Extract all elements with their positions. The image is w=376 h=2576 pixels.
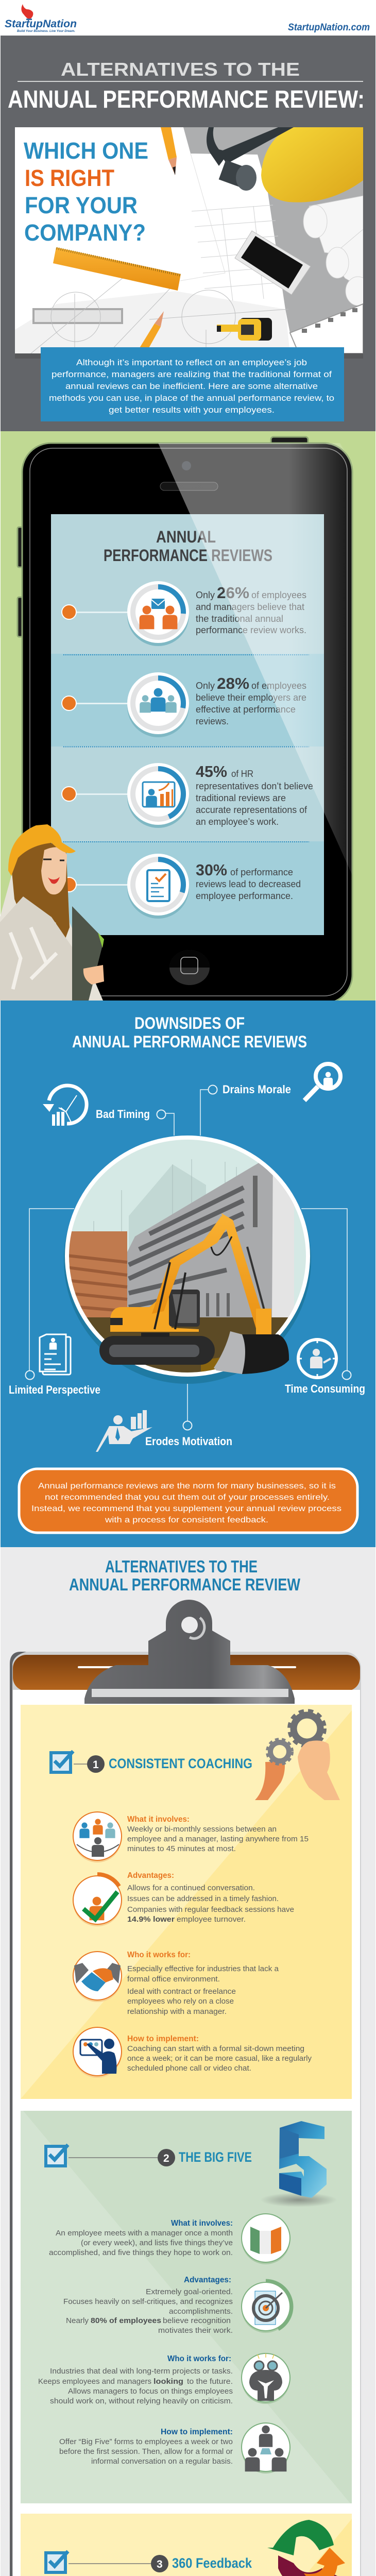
label: erodes motivation: Erodes Motivation: [145, 1435, 232, 1448]
item: how to implement: Coaching can start with a formal sit-down meeting: [127, 2044, 304, 2053]
icon: magnifier: [304, 1064, 340, 1100]
item: who it works for: Who it works for:: [127, 1951, 191, 1959]
label: bad timing: Bad Timing: [96, 1108, 150, 1121]
item: how to implement: informal conversation on a regular basis.: [91, 2457, 233, 2466]
item: who it works for: employees who rely on a close: [127, 1997, 234, 2006]
heading: the big five: 2: [163, 2153, 169, 2164]
intro text block: performance, managers are realizing that the traditional format of: [52, 369, 332, 379]
stat: 45%: [62, 762, 313, 828]
icon: lower pencil: [140, 311, 164, 347]
callout: recommendation: Instead, we recommend that you supplement your annual review process: [31, 1504, 341, 1513]
intro text block: [41, 347, 344, 421]
item: advantages: Issues can be addressed in a timely fashion.: [127, 1894, 279, 1903]
item: how to implement: How to implement:: [127, 2035, 199, 2043]
stat: 45%: representatives don’t believe: [196, 781, 313, 791]
item: what it involves: accomplished, and five things they hope to work on.: [49, 2248, 233, 2257]
stat: 26%: the traditional annual: [196, 614, 283, 624]
heading: downsides: DOWNSIDES OF: [134, 1014, 245, 1032]
card 3: 360 feedback: [21, 2514, 352, 2576]
item: advantages: 14.9% lower: [127, 1915, 175, 1924]
item: advantages: Focuses heavily on self-critiques, and recognizes: [63, 2297, 233, 2306]
icon: 3D five: [260, 2121, 337, 2207]
stat: 30%: 30%: [196, 861, 227, 879]
icon: smartphone: [235, 231, 311, 295]
item: advantages: Advantages:: [184, 2276, 231, 2284]
ground: [87, 1317, 288, 1372]
icon: time target: [297, 1338, 338, 1379]
heading: consistent coaching: [51, 1751, 252, 1773]
stat: 28%: 28%: [217, 674, 249, 692]
item: advantages: 80% of employees: [91, 2316, 161, 2325]
building: [127, 1154, 294, 1317]
icon: spiral notepad: [290, 304, 363, 353]
stat: 30%: [62, 854, 301, 919]
excavator: [99, 1213, 289, 1374]
camera: [182, 461, 191, 470]
intro text block: annual reviews can be inefficient. Here are some alternative: [65, 381, 318, 391]
stat: 26%: performance review works.: [196, 625, 306, 635]
item: advantages: Allows for a continued conversation.: [127, 1884, 255, 1892]
home button: [169, 950, 210, 985]
item: how to implement: before the first session. Then, allow for a formal or: [59, 2447, 233, 2456]
connector lines: [26, 1085, 351, 1430]
item: how to implement: How to implement:: [161, 2428, 233, 2436]
heading: 360 feedback: 3: [157, 2558, 163, 2570]
lower drafting sheet: [15, 291, 290, 353]
hero illustration: [15, 127, 370, 353]
item: who it works for: Allows managers to focus on things employees: [68, 2387, 233, 2396]
label: time consuming: Time Consuming: [285, 1382, 365, 1395]
item: who it works for: to the future.: [187, 2377, 233, 2386]
callout: recommendation: Annual performance reviews are the norm for many businesses, so it is: [38, 1482, 336, 1490]
bucket: [235, 1334, 289, 1374]
illustration: excavator dome: [62, 1136, 314, 1384]
item: who it works for: Keeps employees and managers: [38, 2377, 151, 2386]
heading: annual performance reviews: [104, 528, 272, 565]
intro text block: methods you can use, in place of the annual performance review, to: [49, 393, 334, 403]
clipboard clip: [78, 1600, 296, 1704]
item: who it works for: looking: [153, 2377, 183, 2386]
heading: alternatives: [69, 1557, 301, 1594]
logo: StartupNation: [5, 4, 77, 33]
item: how to implement: [73, 2027, 312, 2078]
stat: 30%: of performance: [230, 867, 293, 877]
icon: hammer: [207, 127, 294, 191]
panel: phone screen: [51, 514, 324, 935]
item: how to implement: once a week; or it can be more casual, like a regularly: [127, 2054, 312, 2063]
item: what it involves: employee and a manager, lasting anywhere from 15: [127, 1835, 309, 1843]
item: advantages: Nearly: [66, 2316, 89, 2325]
header: logos: [5, 4, 370, 33]
item: advantages: believe recognition: [163, 2316, 231, 2325]
heading: consistent coaching: CONSISTENT COACHING: [109, 1756, 252, 1771]
icon: cycle arrows: [267, 2520, 345, 2576]
heading: downsides: ANNUAL PERFORMANCE REVIEWS: [72, 1032, 307, 1051]
heading: 360 feedback: 360 Feedback: [172, 2555, 252, 2571]
item: advantages: motivates their work.: [158, 2326, 233, 2335]
item: who it works for: Ideal with contract or freelance: [127, 1987, 236, 1996]
heading: which one is right: FOR YOUR: [25, 192, 138, 218]
item: who it works for: [38, 2353, 290, 2405]
callout: recommendation: [19, 1469, 357, 1533]
heading: which one is right: IS RIGHT: [25, 165, 114, 191]
item: what it involves: [49, 2214, 290, 2264]
item: who it works for: Especially effective for industries that lack a: [127, 1964, 279, 1973]
label: drains morale: Drains Morale: [223, 1083, 291, 1096]
stat: 45%: 45%: [196, 762, 227, 781]
stat: 45%: traditional reviews are: [196, 793, 286, 803]
stat: 28%: believe their employers are: [196, 692, 306, 703]
intro text block: get better results with your employees.: [109, 405, 275, 415]
title line 1: ALTERNATIVES TO THE: [61, 59, 300, 80]
icon: pencil: [161, 127, 177, 175]
item: advantages: [63, 2276, 292, 2335]
item: how to implement: Offer “Big Five” forms to employees a week or two: [59, 2437, 233, 2446]
brick wall: [67, 1231, 127, 1317]
card 1: consistent coaching: [21, 1705, 352, 2099]
callout: recommendation: with a process for consistent feedback.: [105, 1516, 268, 1524]
heading: the big five: THE BIG FIVE: [179, 2149, 252, 2165]
item: how to implement: [59, 2423, 290, 2473]
item: what it involves: What it involves:: [171, 2219, 233, 2228]
item: what it involves: minutes to 45 minutes at most.: [127, 1844, 236, 1853]
icon: hard hat: [261, 127, 363, 202]
illustration: woman in hard hat: [0, 824, 104, 1001]
item: advantages: accomplishments.: [169, 2307, 233, 2316]
item: what it involves: [73, 1812, 309, 1862]
item: who it works for: Industries that deal with long-term projects or tasks.: [50, 2367, 233, 2376]
intro text block: Although it’s important to reflect on an employee’s job: [76, 358, 307, 367]
stat: 45%: accurate representations of: [196, 805, 307, 815]
item: who it works for: relationship with a manager.: [127, 2007, 227, 2016]
stat: 28%: Only: [196, 681, 215, 691]
stat: 26%: Only: [196, 590, 215, 600]
logo: StartupNation: StartupNation: [5, 18, 77, 30]
heading: which one is right: WHICH ONE: [24, 138, 148, 164]
icon: gears and hands: [255, 1711, 340, 1800]
icon: tape measure: [217, 318, 272, 341]
heading: annual performance reviews: ANNUAL: [156, 528, 216, 546]
callout: recommendation: not recommended that you cut them out of your processes entirely.: [45, 1493, 330, 1502]
stat: 45%: an employee’s work.: [196, 817, 279, 827]
heading: alternatives: ANNUAL PERFORMANCE REVIEW: [69, 1575, 301, 1594]
stat: 28%: reviews.: [196, 716, 229, 726]
item: who it works for: [73, 1951, 279, 2016]
panel: title area: [1, 36, 375, 431]
stat: 28%: [62, 672, 306, 737]
item: how to implement: scheduled phone call or video chat.: [127, 2064, 251, 2073]
stat: 30%: reviews lead to decreased: [196, 879, 301, 889]
smartphone device: [18, 437, 352, 1004]
panel: green background: [1, 431, 375, 1001]
heading: which one is right: COMPANY?: [24, 219, 146, 246]
logo: StartupNation: Build Your Business. Live Your Dream.: [17, 29, 75, 33]
clipboard: [10, 1600, 361, 2576]
panel: downsides: [1, 1001, 375, 1547]
stat: 28%: of employees: [251, 681, 306, 691]
panel: alternatives: [1, 1547, 375, 2576]
item: what it involves: (or every week), and lists five things they’ve: [81, 2239, 233, 2247]
stat: 26%: [62, 581, 306, 646]
heading: annual performance reviews: PERFORMANCE REVIEWS: [104, 546, 272, 565]
item: advantages: Advantages:: [127, 1871, 174, 1880]
heading: alternatives: ALTERNATIVES TO THE: [105, 1557, 258, 1576]
heading: consistent coaching: 1: [93, 1759, 99, 1771]
icon: document: [40, 1334, 71, 1375]
item: what it involves: An employee meets with a manager once a month: [56, 2229, 233, 2238]
item: who it works for: formal office environment.: [127, 1975, 220, 1984]
stat: 26%: and managers believe that: [196, 602, 304, 612]
stat: 28%: effective at performance: [196, 704, 296, 715]
item: advantages: Extremely goal-oriented.: [146, 2287, 233, 2296]
heading: the big five: [46, 2145, 252, 2166]
item: who it works for: Who it works for:: [167, 2354, 231, 2363]
icon: clock: [43, 1086, 87, 1126]
icon: ruler: [53, 247, 181, 291]
card 2: the big five: [21, 2111, 352, 2503]
stat: 26%: 26%: [217, 584, 249, 602]
stat: 30%: employee performance.: [196, 891, 293, 901]
website name: StartupNation.com: [288, 22, 370, 33]
screen glare: [158, 443, 352, 875]
heading: downsides: [72, 1014, 307, 1051]
stat: 26%: of employees: [251, 590, 306, 600]
label: limited perspective: Limited Perspective: [9, 1383, 100, 1396]
heading: which one is right: [24, 138, 148, 246]
item: what it involves: Weekly or bi-monthly sessions between an: [127, 1825, 277, 1834]
icon: blueprint rolls: [303, 196, 370, 306]
item: what it involves: What it involves:: [127, 1815, 190, 1824]
item: advantages: employee turnover.: [177, 1915, 246, 1924]
heading: 360 feedback: [46, 2551, 252, 2572]
item: advantages: [72, 1871, 294, 1926]
item: advantages: Companies with regular feedback sessions have: [127, 1905, 294, 1914]
item: who it works for: should work on, without relying heavily on criticism.: [50, 2397, 233, 2405]
stat: 45%: of HR: [231, 769, 253, 779]
speaker: [160, 482, 218, 490]
icon: person with chart: [96, 1410, 152, 1452]
